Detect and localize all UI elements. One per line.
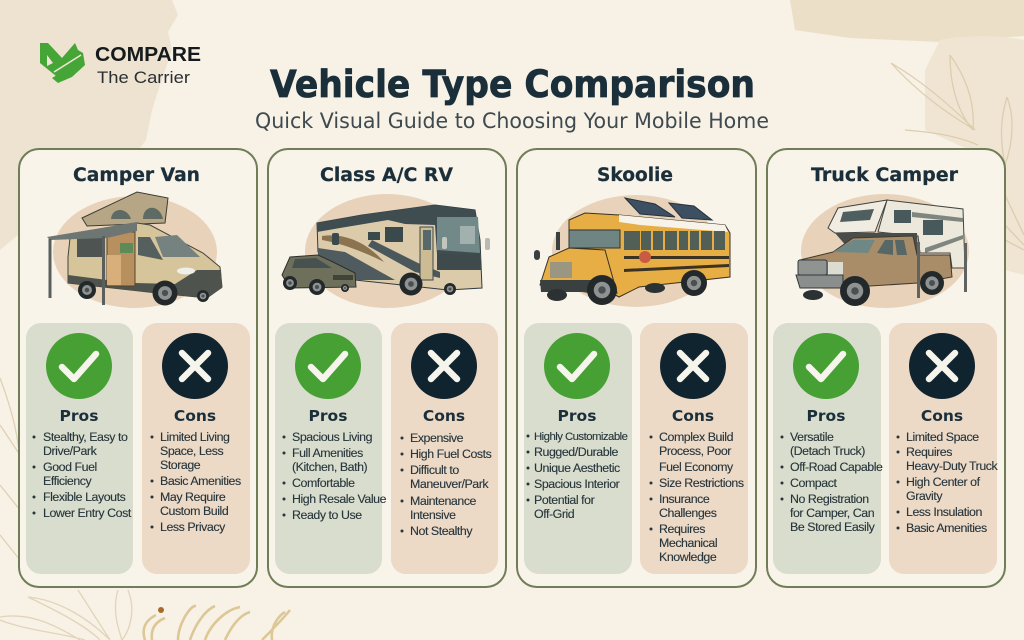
- pros list: Off-Grid: [534, 507, 575, 521]
- cons list: Mechanical: [659, 536, 717, 550]
- title: Vehicle Type Comparison: [270, 63, 755, 106]
- cons box: [640, 323, 748, 574]
- cons list: Intensive: [410, 508, 456, 522]
- pros heading: Pros: [309, 407, 347, 425]
- pros list: Full Amenities: [292, 446, 363, 460]
- icon: cross: [162, 333, 228, 399]
- pros list: Drive/Park: [43, 444, 98, 458]
- cons list: Heavy-Duty Truck: [906, 459, 999, 473]
- cons list: Maintenance: [410, 494, 477, 508]
- pros list: Highly Customizable: [534, 431, 628, 443]
- pros list: [282, 430, 387, 522]
- cons box: [889, 323, 999, 574]
- icon: check: [295, 333, 361, 399]
- cons list: Challenges: [659, 506, 717, 520]
- heading: Class A/C RV: Class A/C RV: [320, 165, 454, 186]
- pros list: Lower Entry Cost: [43, 506, 132, 520]
- cons list: [896, 430, 999, 535]
- pros list: (Kitchen, Bath): [292, 460, 368, 474]
- pros list: Ready to Use: [292, 508, 362, 522]
- icon: check: [46, 333, 112, 399]
- pros list: No Registration: [790, 492, 869, 506]
- cons heading: Cons: [921, 407, 963, 425]
- pros heading: Pros: [60, 407, 98, 425]
- cons list: Less Privacy: [160, 520, 226, 534]
- cons list: Custom Build: [160, 504, 229, 518]
- cons list: Process, Poor: [659, 444, 731, 458]
- pros list: Be Stored Easily: [790, 520, 876, 534]
- cons list: Basic Amenities: [160, 474, 241, 488]
- pros list: Off-Road Capable: [790, 460, 883, 474]
- pros list: (Detach Truck): [790, 444, 865, 458]
- cons list: [650, 430, 744, 564]
- icon: cross: [909, 333, 975, 399]
- cons list: High Center of: [906, 475, 981, 489]
- logo: [40, 43, 201, 87]
- pros box: [524, 323, 632, 574]
- cons list: [400, 431, 492, 538]
- cons list: Gravity: [906, 489, 943, 503]
- heading: Camper Van: Camper Van: [73, 165, 200, 186]
- pros list: High Resale Value: [292, 492, 387, 506]
- pros list: Good Fuel: [43, 460, 97, 474]
- cons list: Size Restrictions: [659, 476, 744, 490]
- cons heading: Cons: [423, 407, 465, 425]
- icon: check: [544, 333, 610, 399]
- cons heading: Cons: [174, 407, 216, 425]
- cons list: Knowledge: [659, 550, 717, 564]
- panel: Truck Camper: [767, 149, 1005, 587]
- pros box: [275, 323, 387, 574]
- cons list: [150, 430, 241, 534]
- cons list: Complex Build: [659, 430, 734, 444]
- pros list: Versatile: [790, 430, 834, 444]
- cons list: Limited Living: [160, 430, 230, 444]
- pros list: Rugged/Durable: [534, 445, 618, 459]
- icon: cross: [660, 333, 726, 399]
- pros list: Flexible Layouts: [43, 490, 126, 504]
- pros list: Efficiency: [43, 474, 93, 488]
- icon: check: [793, 333, 859, 399]
- cons list: May Require: [160, 490, 226, 504]
- pros list: [526, 431, 628, 521]
- subtitle: Quick Visual Guide to Choosing Your Mobile Home: [255, 109, 769, 133]
- pros list: [32, 430, 132, 520]
- cons list: Requires: [906, 445, 952, 459]
- cons heading: Cons: [672, 407, 714, 425]
- cons list: Fuel Economy: [659, 460, 734, 474]
- cons list: Less Insulation: [906, 505, 982, 519]
- cons list: Limited Space: [906, 430, 979, 444]
- pros list: Potential for: [534, 493, 595, 507]
- cons list: Storage: [160, 458, 201, 472]
- logo: The Carrier: [97, 68, 190, 87]
- cons box: [142, 323, 250, 574]
- cons list: High Fuel Costs: [410, 447, 492, 461]
- illustration: school bus: [534, 195, 730, 307]
- panel: Skoolie: [517, 149, 756, 587]
- cons list: Space, Less: [160, 444, 223, 458]
- heading: Skoolie: Skoolie: [597, 165, 673, 186]
- panel: Camper Van: [19, 149, 257, 587]
- cons list: Basic Amenities: [906, 521, 987, 535]
- illustration: truck camper: [796, 194, 969, 308]
- cons list: Difficult to: [410, 463, 459, 477]
- pros heading: Pros: [807, 407, 845, 425]
- pros list: Spacious Living: [292, 430, 373, 444]
- illustration: camper van: [47, 192, 222, 308]
- logo: COMPARE: [95, 44, 201, 66]
- panel: Class A/C RV: [268, 149, 506, 587]
- heading: Truck Camper: Truck Camper: [811, 165, 959, 186]
- pros list: for Camper, Can: [790, 506, 875, 520]
- pros list: [780, 430, 883, 534]
- pros list: Spacious Interior: [534, 477, 620, 491]
- cons list: Maneuver/Park: [410, 477, 489, 491]
- pros heading: Pros: [558, 407, 596, 425]
- cons list: Requires: [659, 522, 705, 536]
- cons list: Not Stealthy: [410, 524, 473, 538]
- pros list: Unique Aesthetic: [534, 461, 620, 475]
- icon: cross: [411, 333, 477, 399]
- illustration: motorhome and car: [282, 194, 490, 308]
- pros list: Compact: [790, 476, 837, 490]
- pros list: Stealthy, Easy to: [43, 430, 128, 444]
- cons box: [391, 323, 498, 574]
- cons list: Insurance: [659, 492, 710, 506]
- pros list: Comfortable: [292, 476, 355, 490]
- pros box: [26, 323, 133, 574]
- cons list: Expensive: [410, 431, 464, 445]
- pros box: [773, 323, 883, 574]
